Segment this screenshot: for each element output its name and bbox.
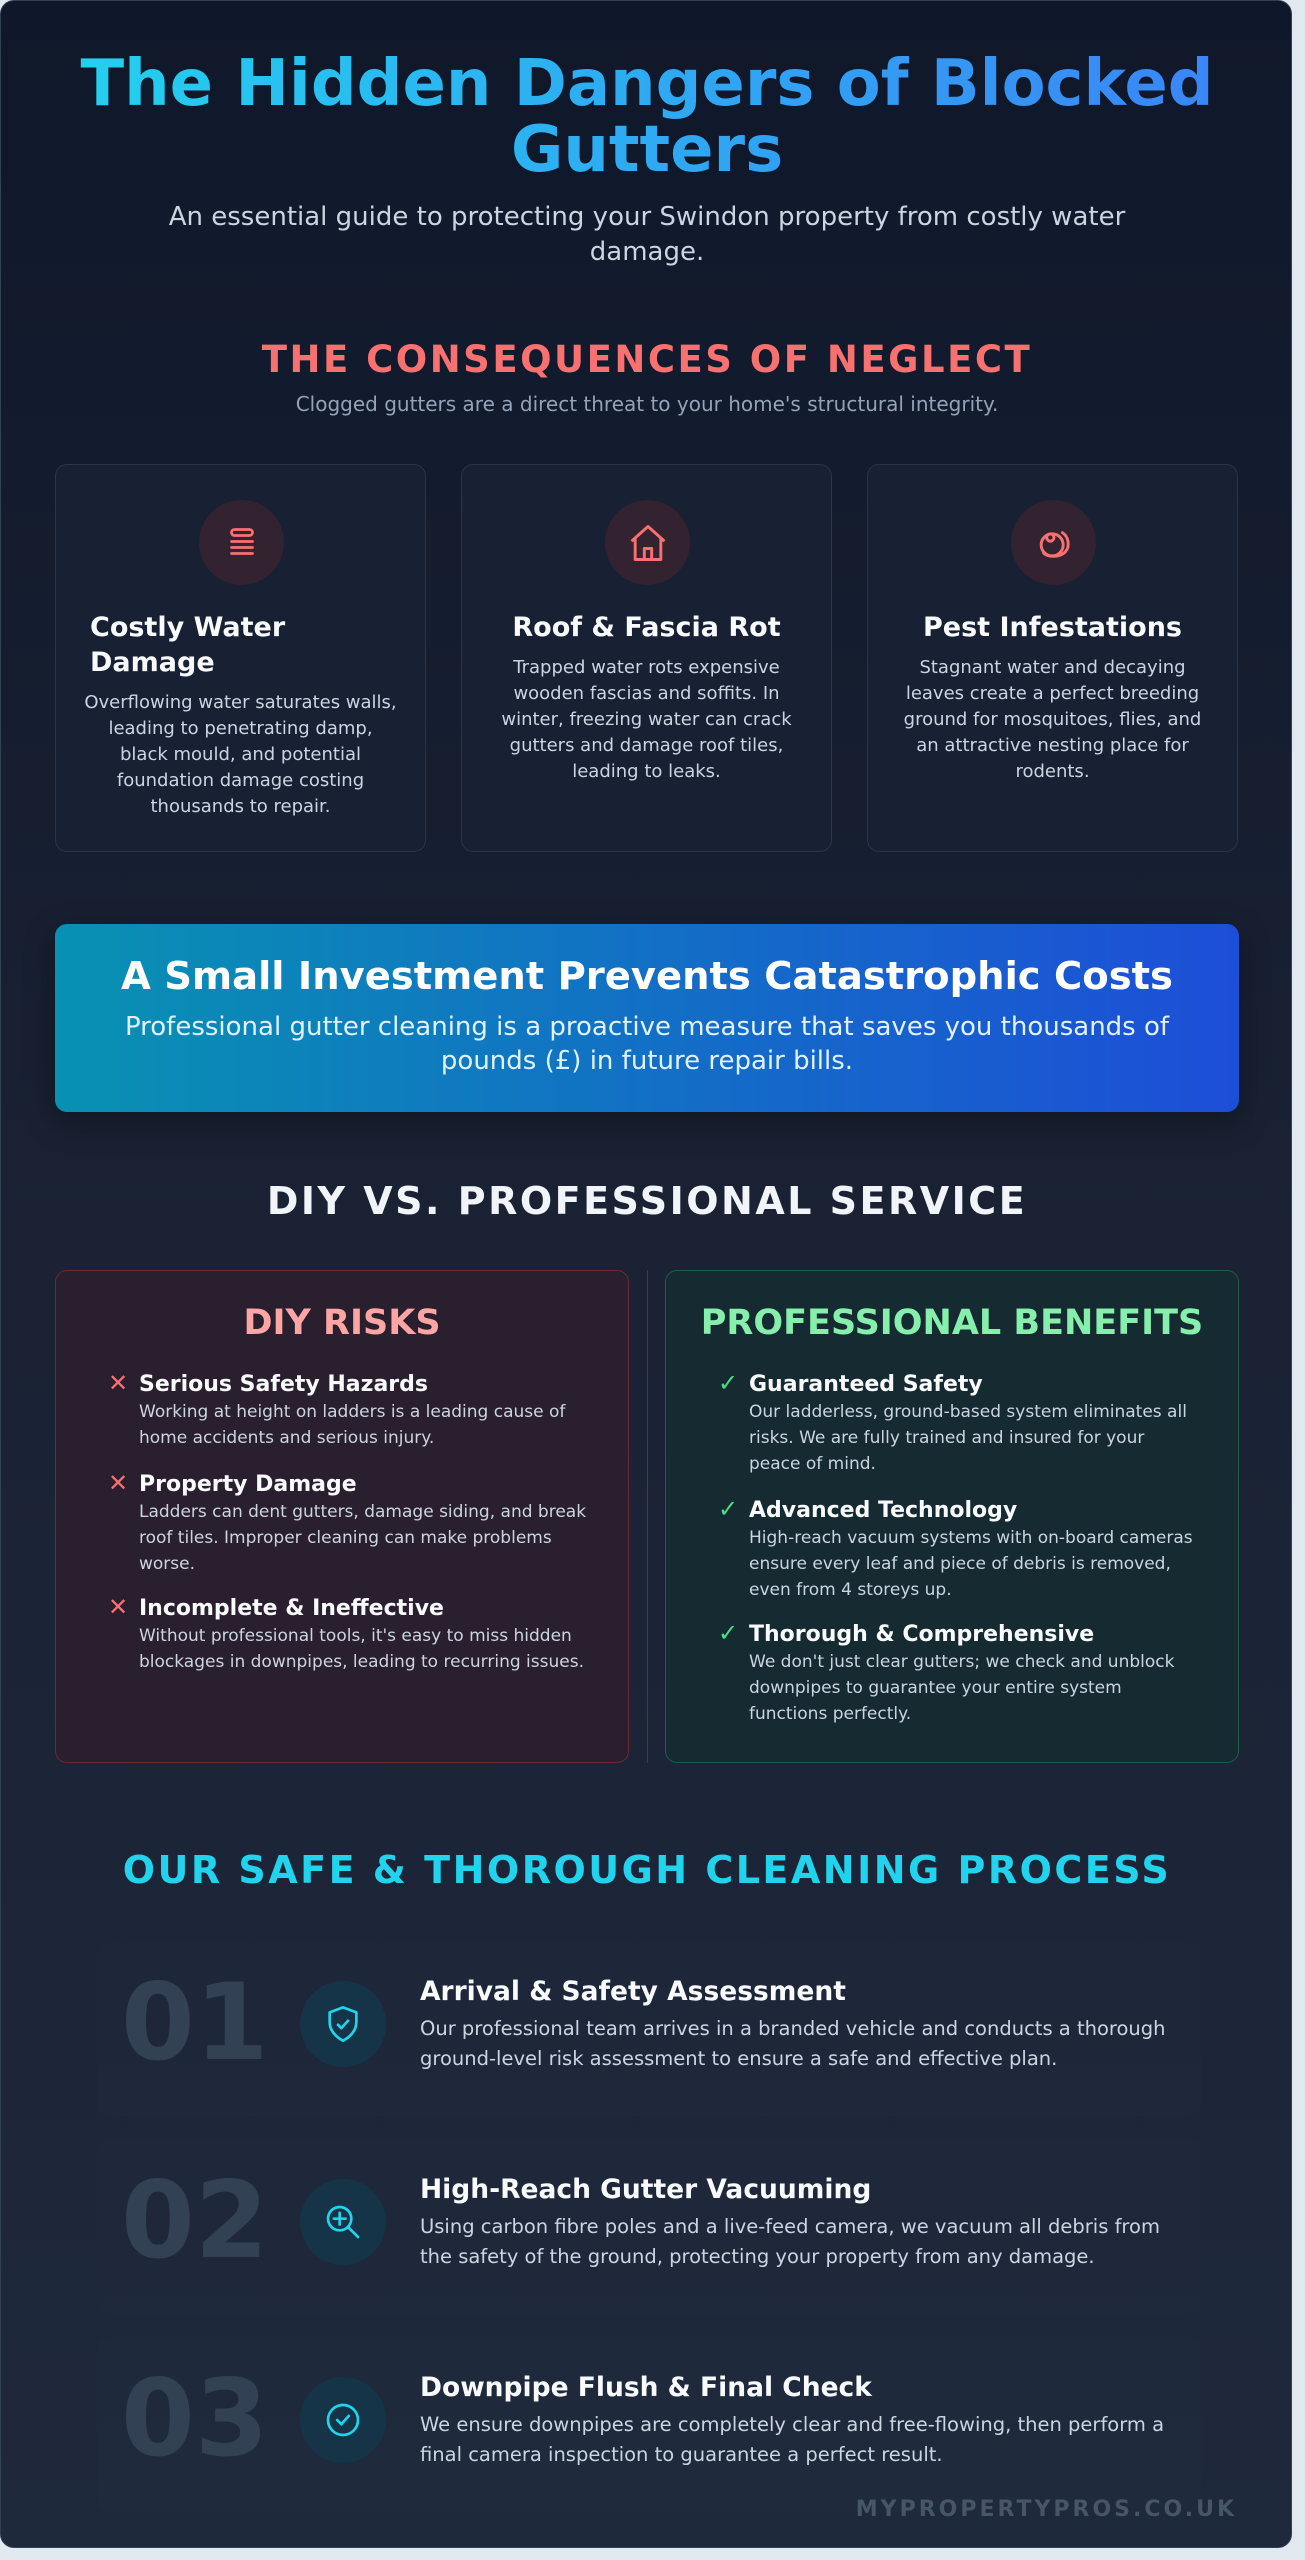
card: pests <box>867 464 1238 852</box>
item: guaranteed safety: ✓ <box>718 1369 738 1397</box>
step 1 <box>97 1941 1201 2116</box>
step 2 <box>97 2139 1201 2314</box>
step number: 03 <box>121 2357 269 2480</box>
item: incomplete: ✕ <box>108 1593 128 1621</box>
banner text: Professional gutter cleaning is a proactive measure that saves you thousands of pounds (£) in future repair bills. <box>125 1012 1169 1076</box>
step number: 01 <box>121 1961 269 2084</box>
item: property damage <box>108 1469 586 1574</box>
item: incomplete: Incomplete & Ineffective <box>139 1596 444 1621</box>
icon: magnifier <box>300 2179 386 2265</box>
icon: pest <box>1011 500 1096 585</box>
icon: house <box>605 500 690 585</box>
heading: consequences: THE CONSEQUENCES OF NEGLECT <box>262 338 1032 381</box>
item: guaranteed safety <box>718 1369 1187 1474</box>
item: safety hazards: Working at height on ladders is a leading cause of home accidents and serious injury. <box>139 1402 565 1448</box>
item: thorough: Thorough & Comprehensive <box>749 1622 1094 1647</box>
subtitle: An essential guide to protecting your Swindon property from costly water damage. <box>169 202 1125 267</box>
item: advanced technology: ✓ <box>718 1495 738 1523</box>
panel: DIY risks <box>55 1270 629 1763</box>
step text: Our professional team arrives in a branded vehicle and conducts a thorough ground-level risk assessment to ensure a safe and effective plan. <box>420 2017 1166 2070</box>
item: safety hazards <box>108 1369 566 1448</box>
card title: Pest Infestations <box>923 612 1182 643</box>
panel heading: PROFESSIONAL BENEFITS <box>701 1303 1203 1343</box>
item: safety hazards: ✕ <box>108 1369 128 1397</box>
step 3 <box>97 2337 1201 2512</box>
icon: check circle <box>300 2377 386 2463</box>
subheading: consequences: Clogged gutters are a direct threat to your home's structural integrity. <box>296 392 998 416</box>
item: incomplete: Without professional tools, it's easy to miss hidden blockages in downpipes, leading to recurring issues. <box>139 1626 584 1672</box>
card text: Trapped water rots expensive wooden fascias and soffits. In winter, freezing water can crack gutters and damage roof tiles, leading to leaks. <box>501 657 792 782</box>
title: The Hidden Dangers of Blocked Gutters <box>80 47 1214 187</box>
panel: professional benefits <box>665 1270 1239 1763</box>
item: property damage: Ladders can dent gutters, damage siding, and break roof tiles. Improper cleaning can make problems worse. <box>139 1502 586 1574</box>
step title: Arrival & Safety Assessment <box>420 1976 846 2007</box>
step title: Downpipe Flush & Final Check <box>420 2372 872 2403</box>
card text: Overflowing water saturates walls, leading to penetrating damp, black mould, and potential foundation damage costing thousands to repair. <box>84 692 397 817</box>
item: advanced technology: High-reach vacuum systems with on-board cameras ensure every leaf and piece of debris is removed, even from 4 storeys up. <box>749 1528 1193 1600</box>
heading: process: OUR SAFE & THOROUGH CLEANING PROCESS <box>123 1848 1171 1892</box>
step title: High-Reach Gutter Vacuuming <box>420 2174 871 2205</box>
panel heading: DIY RISKS <box>243 1303 441 1343</box>
item: thorough: ✓ <box>718 1619 738 1647</box>
item: advanced technology <box>718 1495 1193 1600</box>
banner: investment <box>55 924 1239 1112</box>
step text: Using carbon fibre poles and a live-feed camera, we vacuum all debris from the safety of the ground, protecting your property from any damage. <box>420 2215 1160 2268</box>
item: thorough <box>718 1619 1174 1724</box>
item: guaranteed safety: Our ladderless, ground-based system eliminates all risks. We are fully trained and insured for your peace of mind. <box>749 1402 1187 1474</box>
card: roof rot <box>461 464 832 852</box>
card title: Roof & Fascia Rot <box>512 612 781 643</box>
card: costly water damage <box>55 464 426 852</box>
icon: shield <box>300 1981 386 2067</box>
banner title: A Small Investment Prevents Catastrophic Costs <box>121 954 1173 999</box>
item: property damage: ✕ <box>108 1469 128 1497</box>
card title: Costly Water Damage <box>90 612 285 678</box>
card text: Stagnant water and decaying leaves create a perfect breeding ground for mosquitoes, flies, and an attractive nesting place for rodents. <box>904 657 1201 782</box>
item: advanced technology: Advanced Technology <box>749 1498 1017 1523</box>
item: property damage: Property Damage <box>139 1472 357 1497</box>
item: safety hazards: Serious Safety Hazards <box>139 1372 428 1397</box>
item: guaranteed safety: Guaranteed Safety <box>749 1372 983 1397</box>
step text: We ensure downpipes are completely clear and free-flowing, then perform a final camera inspection to guarantee a perfect result. <box>420 2413 1164 2466</box>
heading: diy vs pro: DIY VS. PROFESSIONAL SERVICE <box>267 1179 1027 1223</box>
footer: MYPROPERTYPROS.CO.UK <box>856 2497 1237 2522</box>
step number: 02 <box>121 2159 269 2282</box>
icon: water layers <box>199 500 284 585</box>
item: thorough: We don't just clear gutters; we check and unblock downpipes to guarantee your entire system functions perfectly. <box>749 1652 1174 1724</box>
item: incomplete <box>108 1593 584 1672</box>
